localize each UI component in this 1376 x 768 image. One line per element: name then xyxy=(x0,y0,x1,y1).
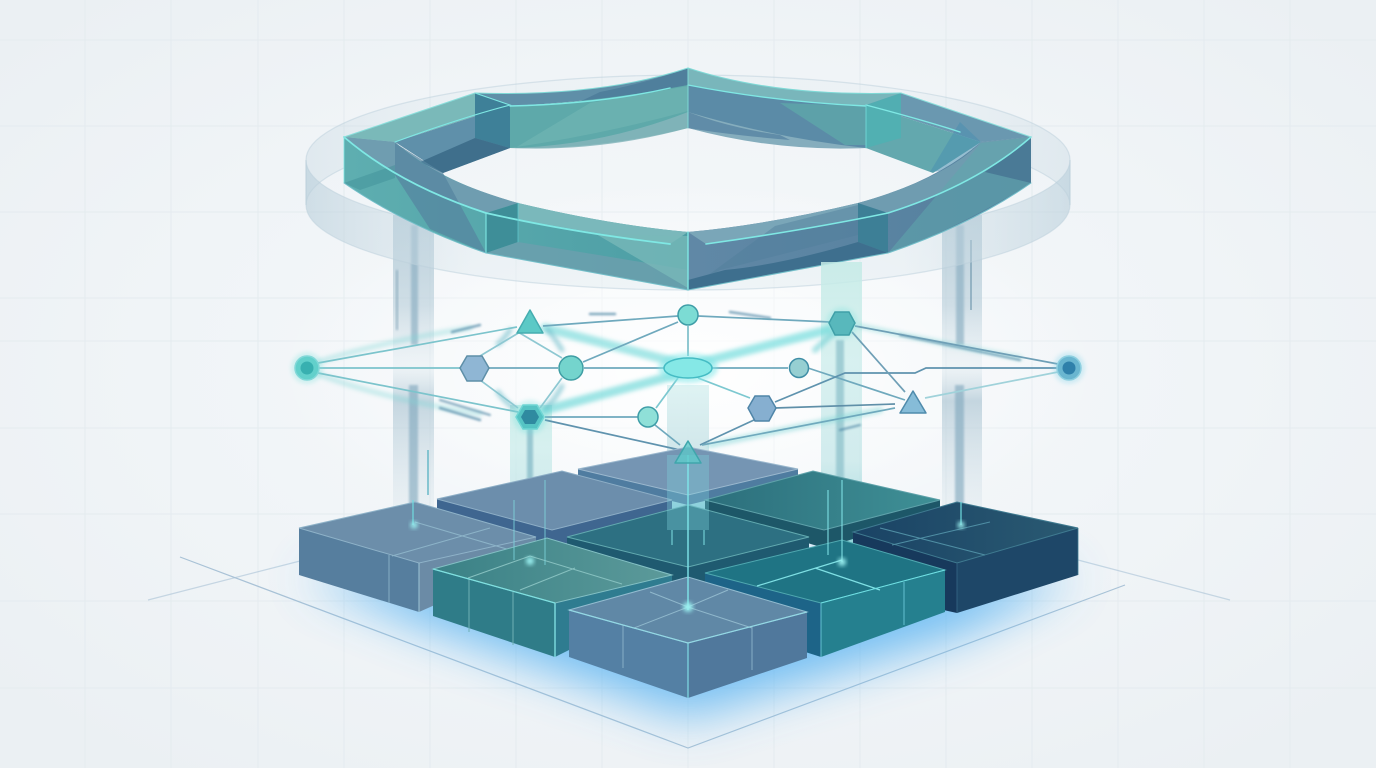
pillar: left xyxy=(393,215,434,515)
node: circle right xyxy=(790,358,808,378)
shield: back left top surface xyxy=(475,68,688,106)
shield: back right inner wall xyxy=(688,85,866,148)
pillar: right xyxy=(942,215,982,515)
centre haze xyxy=(268,180,1108,560)
block: front left teal xyxy=(433,538,672,657)
shield: right side inner wall xyxy=(866,105,981,173)
shield: glowing edges xyxy=(344,68,1031,290)
node: small circle lower xyxy=(638,407,658,427)
node: far right circle xyxy=(1053,352,1085,384)
shield xyxy=(344,68,1031,290)
shield: left side inner wall xyxy=(395,105,510,173)
block: left xyxy=(299,502,536,612)
node: central hub xyxy=(658,353,718,383)
node: triangle top left xyxy=(517,310,543,333)
node: hexagon top right xyxy=(826,307,858,339)
block: centre xyxy=(567,505,809,587)
node: bottom triangle xyxy=(675,441,701,463)
block: back centre xyxy=(578,447,798,505)
node: hexagon lower right xyxy=(748,396,776,421)
node: hexagon lower left xyxy=(513,400,547,434)
network: glowing streaks xyxy=(318,312,1020,445)
containment ring xyxy=(306,75,1070,290)
block: front right teal xyxy=(705,540,945,657)
floor glow xyxy=(300,560,1078,718)
node: triangle right xyxy=(900,391,926,413)
node: far left circle xyxy=(291,352,323,384)
rear support pillars xyxy=(393,215,982,515)
block: back left xyxy=(437,471,672,548)
shield: back left inner wall xyxy=(510,85,688,148)
network: connecting lines xyxy=(318,316,1060,450)
block: front centre xyxy=(569,577,807,698)
inner support pillars xyxy=(510,262,862,547)
shield: left side top surface xyxy=(344,93,510,142)
pillar: inner left xyxy=(510,405,552,525)
block: right dark xyxy=(853,502,1078,613)
pillar: inner right xyxy=(821,262,862,547)
shield: front right wall xyxy=(688,137,1031,290)
shield: front left wall xyxy=(344,137,688,290)
network layer xyxy=(291,305,1085,450)
centre light beams over blocks xyxy=(410,455,964,612)
floor plane xyxy=(148,557,1230,748)
node: hexagon left xyxy=(460,356,489,381)
node: top circle xyxy=(678,305,698,325)
shield: right side top surface xyxy=(866,93,1031,142)
block: back right xyxy=(705,471,940,548)
node: circle left xyxy=(559,356,583,380)
block grid xyxy=(299,447,1078,698)
pillar: centre xyxy=(667,385,709,530)
shield: back right top surface xyxy=(688,68,901,106)
